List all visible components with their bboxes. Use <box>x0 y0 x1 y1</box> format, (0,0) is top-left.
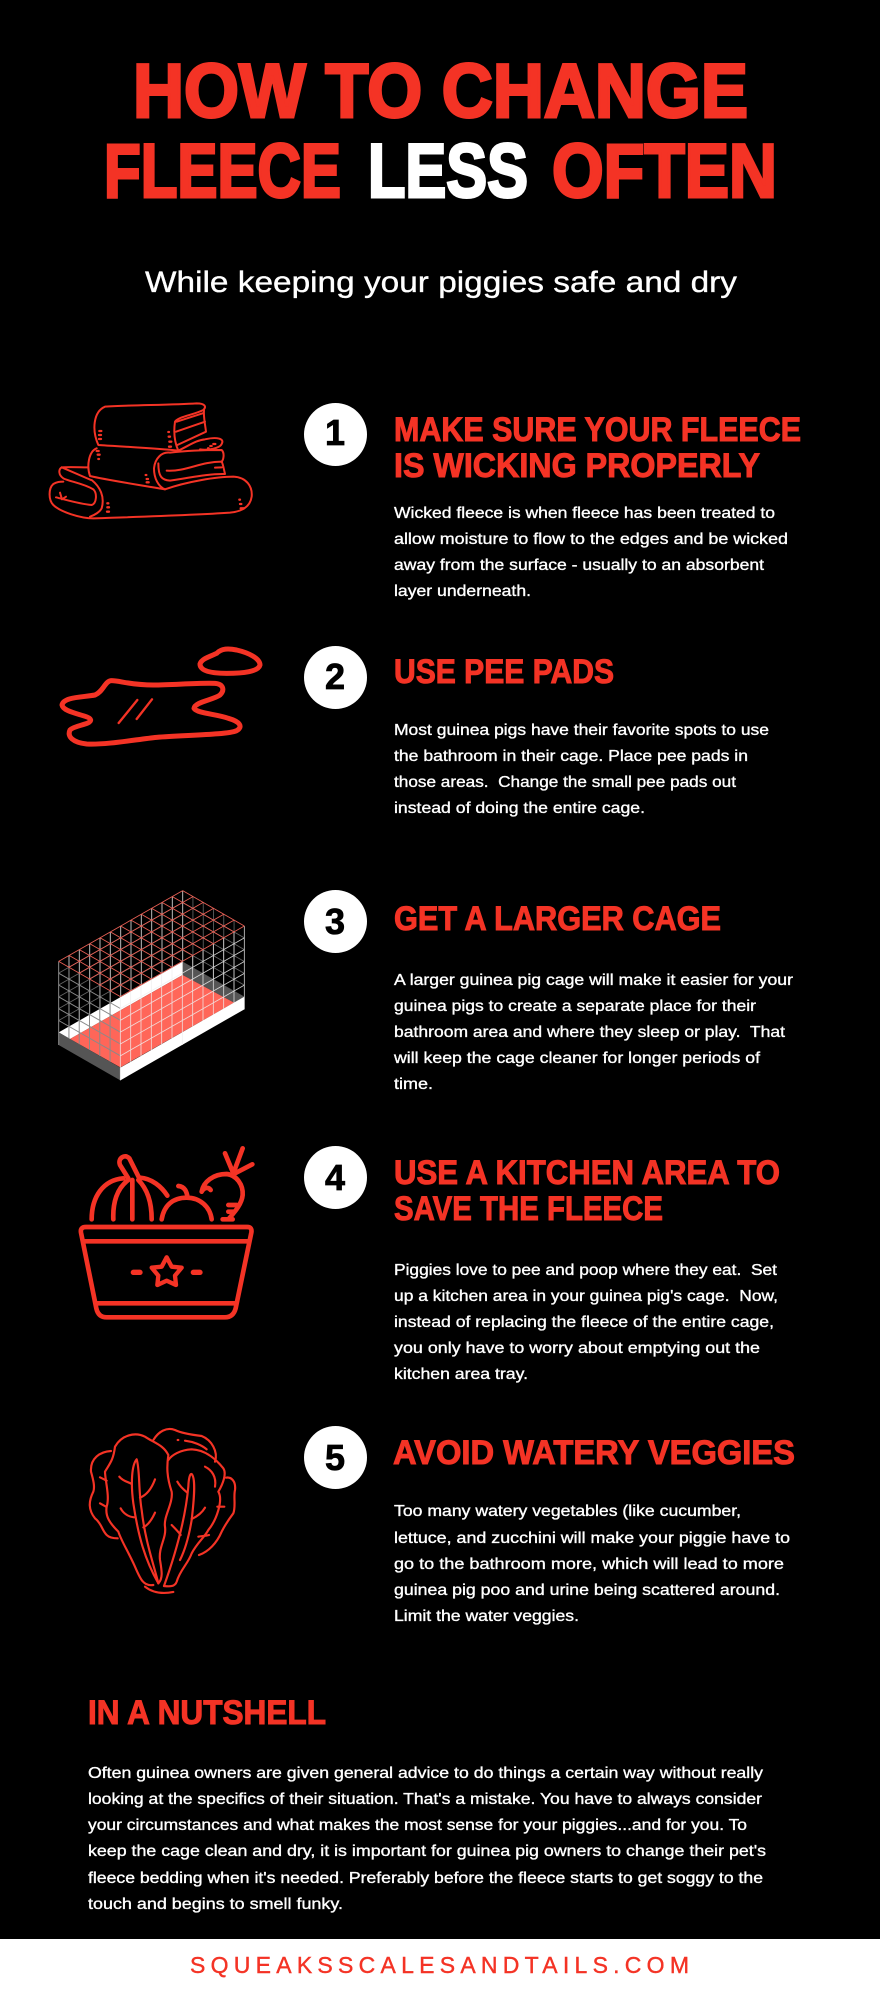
body text 4: you only have to worry about emptying out the <box>394 1340 760 1357</box>
number badge 3 <box>304 890 367 953</box>
title: HOW TO CHANGE <box>133 49 748 134</box>
icon: isometric cage <box>59 891 244 1080</box>
body text 2: instead of doing the entire cage. <box>394 800 645 817</box>
heading 3: GET A LARGER CAGE <box>394 900 721 938</box>
title: LESS <box>368 129 528 214</box>
icon: lettuce <box>90 1429 235 1593</box>
number badge 2: 2 <box>325 656 345 697</box>
heading 1: MAKE SURE YOUR FLEECE <box>394 411 801 449</box>
heading: in a nutshell: IN A NUTSHELL <box>88 1694 326 1732</box>
panel: step 2 pee pads <box>62 646 769 817</box>
title: OFTEN <box>552 129 777 214</box>
body text 1: allow moisture to flow to the edges and be wicked <box>394 531 788 548</box>
number badge 4: 4 <box>325 1157 345 1198</box>
body text 5 <box>394 1503 790 1625</box>
footer band: SQUEAKSSCALESANDTAILS.COM <box>190 1952 689 1978</box>
body text 5: guinea pig poo and urine being scattered around. <box>394 1582 780 1599</box>
summary text: your circumstances and what makes the most sense for your piggies...and for you. To <box>88 1817 747 1834</box>
panel: step 1 wicking <box>50 403 801 600</box>
number badge 4 <box>304 1146 367 1209</box>
heading 1 <box>394 411 801 485</box>
icon: vegetable basket <box>81 1148 252 1317</box>
summary text: fleece bedding when it's needed. Preferably before the fleece starts to get soggy to the <box>88 1870 763 1887</box>
title: FLEECE <box>104 129 341 214</box>
body text 5: lettuce, and zucchini will make your piggie have to <box>394 1530 790 1547</box>
panel: step 5 watery veggies <box>90 1426 795 1625</box>
body text 3: will keep the cage cleaner for longer periods of <box>393 1050 761 1067</box>
body text 2 <box>394 722 769 817</box>
panel: in a nutshell <box>88 1694 766 1913</box>
heading 4: SAVE THE FLEECE <box>394 1190 663 1228</box>
number badge 3: 3 <box>325 901 345 942</box>
body text 4 <box>394 1262 778 1383</box>
number badge 5: 5 <box>325 1437 345 1478</box>
summary text: looking at the specifics of their situation. That's a mistake. You have to always consider <box>88 1791 763 1808</box>
heading 5: AVOID WATERY VEGGIES <box>393 1434 795 1472</box>
body text 4: up a kitchen area in your guinea pig's cage. Now, <box>394 1288 778 1305</box>
body text 5: Too many watery vegetables (like cucumber, <box>394 1503 741 1520</box>
body text 5: go to the bathroom more, which will lead to more <box>394 1556 784 1573</box>
body text 1 <box>394 505 788 600</box>
body text 4: kitchen area tray. <box>394 1366 528 1383</box>
body text 4: instead of replacing the fleece of the entire cage, <box>394 1314 774 1331</box>
heading 2: USE PEE PADS <box>394 653 614 691</box>
summary text <box>88 1765 766 1913</box>
body text 5: Limit the water veggies. <box>394 1608 579 1625</box>
number badge 1: 1 <box>325 412 345 453</box>
body text 2: Most guinea pigs have their favorite spots to use <box>394 722 769 739</box>
body text 3: time. <box>394 1076 433 1093</box>
summary text: Often guinea owners are given general advice to do things a certain way without really <box>88 1765 763 1782</box>
number badge 1 <box>304 403 367 466</box>
heading 4 <box>394 1154 780 1228</box>
body text 3 <box>393 972 794 1093</box>
number badge 5 <box>304 1426 367 1489</box>
title <box>104 49 777 214</box>
panel: step 4 kitchen area <box>81 1146 780 1383</box>
body text 3: guinea pigs to create a separate place for their <box>394 998 757 1015</box>
icon: puddle <box>62 649 260 744</box>
icon: folded towels <box>50 403 252 518</box>
body text 3: bathroom area and where they sleep or play. That <box>394 1024 786 1041</box>
body text 1: layer underneath. <box>394 583 531 600</box>
footer band <box>0 1939 880 2000</box>
body text 2: the bathroom in their cage. Place pee pads in <box>394 748 748 765</box>
heading 1: IS WICKING PROPERLY <box>394 447 760 485</box>
body text 4: Piggies love to pee and poop where they eat. Set <box>394 1262 778 1279</box>
subtitle: While keeping your piggies safe and dry <box>145 266 737 299</box>
panel: step 3 larger cage <box>59 890 794 1093</box>
summary text: keep the cage clean and dry, it is important for guinea pig owners to change their pet's <box>88 1843 766 1860</box>
summary text: touch and begins to smell funky. <box>88 1896 343 1913</box>
body text 1: Wicked fleece is when fleece has been treated to <box>394 505 775 522</box>
body text 2: those areas. Change the small pee pads out <box>394 774 737 791</box>
body text 1: away from the surface - usually to an absorbent <box>394 557 765 574</box>
body text 3: A larger guinea pig cage will make it easier for your <box>394 972 794 989</box>
number badge 2 <box>304 646 367 709</box>
heading 4: USE A KITCHEN AREA TO <box>394 1154 780 1192</box>
